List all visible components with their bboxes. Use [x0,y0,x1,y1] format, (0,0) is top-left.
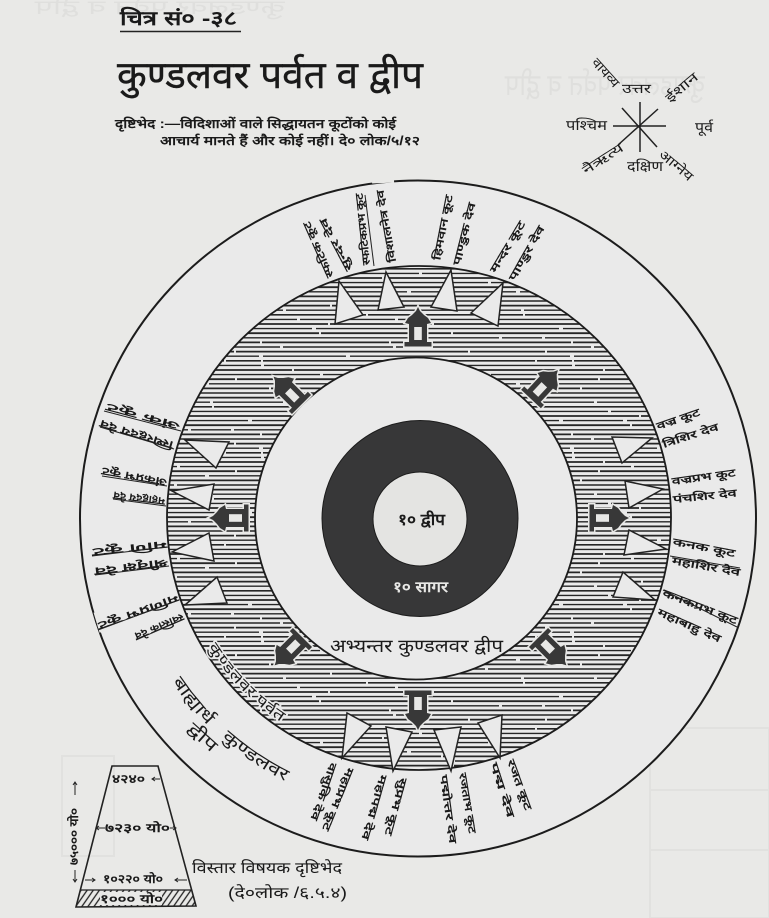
title: कुण्डलवर पर्वत व द्वीप [117,53,424,99]
trapezoid: width variant diagram: ७२३० यो० [105,821,170,835]
label: abhyantar kundalavar dweep: अभ्यन्तर कुण्डलवर द्वीप [330,635,504,657]
note text block [114,116,420,148]
west peak labels: मणिप्रभ कूट [95,590,182,633]
compass rose: पूर्व [695,119,714,136]
curved label: dweep: द्वीप [183,718,222,756]
east peak labels: कनकप्रभ कूट [659,587,740,628]
south peak labels: सुप्रभ कूट [381,775,409,838]
south peak labels: रजताभ कूट [455,771,478,835]
east peak labels: कनक कूट [670,536,737,561]
north peak labels: स्फटिकप्रभ कूट [352,192,374,267]
west peak labels [90,399,187,643]
south peak labels [306,756,534,846]
trapezoid: width variant diagram: ४२४० [112,772,145,786]
caption: width variant: (दे०लोक /६.५.४) [228,884,347,902]
north peak labels: हिमवान कूट [430,193,457,263]
south peak labels: रजत कूट [503,756,534,813]
note text block: दृष्टिभेद :—विदिशाओं वाले सिद्धायतन कूटोंको कोई [114,116,397,132]
mountain ring: kundalavar parvat hatching [167,266,671,770]
north peak labels: पाण्डुक देव [450,199,480,268]
east peak labels: महाबाहु देव [654,605,725,647]
trapezoid: width variant diagram: १०२२० यो० [103,872,163,886]
south peak labels: वासुकि देव [306,759,340,824]
curved label: bahyardh kundalavar: बाह्यार्ध कुण्डलवर [175,676,290,780]
south peak labels: पद्म देव [487,759,518,821]
east peak labels: त्रिशिर देव [659,420,722,451]
compass rose: पश्चिम [566,117,608,133]
south peak labels: महापद्म देव [358,772,390,843]
west peak labels: श्रीवृक्ष देव [91,555,171,578]
caption: width variant: विस्तार विषयक दृष्टिभेद [192,859,343,878]
east peak labels: वज्रप्रभ कूट [670,467,737,489]
curved label: kundalavar parvat: कुण्डलवर पर्वत [206,640,288,721]
label: 10 sagar: १० सागर [393,579,449,596]
figure number heading: चित्र सं० -३८ [119,6,237,30]
compass rose: आग्नेय [656,147,697,184]
west peak labels: स्थिरहृदय देव [97,417,176,452]
north peak labels: विशालनेत्र देव [373,187,399,265]
compass rose: वायव्य [589,55,623,91]
caption: width variant [192,859,347,902]
north peak labels: पाण्डुर देव [505,222,549,285]
inner island [373,472,467,566]
outer circle: bahyardh kundalavar dweep [80,180,756,856]
north peak labels [300,187,549,285]
east peak labels: महाशिर देव [669,554,743,579]
peak triangles: east [612,437,666,600]
south peak labels: पद्मोत्तर देव [437,772,460,846]
peak triangles: west [172,440,229,605]
note text block: आचार्य मानते हैं और कोई नहीं। दे० लोक/५/१२ [160,133,420,148]
north peak labels: मन्दर कूट [487,218,529,277]
compass rose: नैऋत्य [579,140,627,178]
label: 10 dweep: १० द्वीप [398,510,446,529]
compass rose: दक्षिण [627,158,664,174]
peak triangles: north [335,270,503,326]
compass rose: उत्तर [622,81,652,96]
south peak labels: महाप्रभ कूट [318,764,356,833]
east peak labels: वज्र कूट [654,406,703,434]
east peak labels [654,406,743,647]
bleed-through ghost from reverse page: कुण्डलवर पर्वत व द्वीप [504,68,705,104]
west peak labels: महाहृदय देव [111,489,167,508]
west peak labels: अंक कूट [103,399,182,432]
west peak labels: स्वस्तिक देव [132,610,187,643]
trapezoid: width variant diagram: १००० यो० [100,892,163,906]
north peak labels: सुन्दर देव [316,214,357,275]
trapezoid: width variant diagram: ७५००० यो० [67,808,81,865]
figure number heading [119,6,241,32]
north peak labels: स्फटिक कूट [300,218,338,281]
compass rose [566,55,714,184]
trapezoid: width variant diagram [67,766,196,907]
peak triangles: south [342,713,502,771]
east peak labels: पंचशिर देव [671,486,739,506]
west peak labels: मणि कूट [90,537,170,559]
temples on the mountain ring [209,307,629,730]
compass rose: ईशान [662,69,702,105]
west peak labels: अंकप्रभ कूट [100,463,168,488]
sea ring [322,420,518,616]
